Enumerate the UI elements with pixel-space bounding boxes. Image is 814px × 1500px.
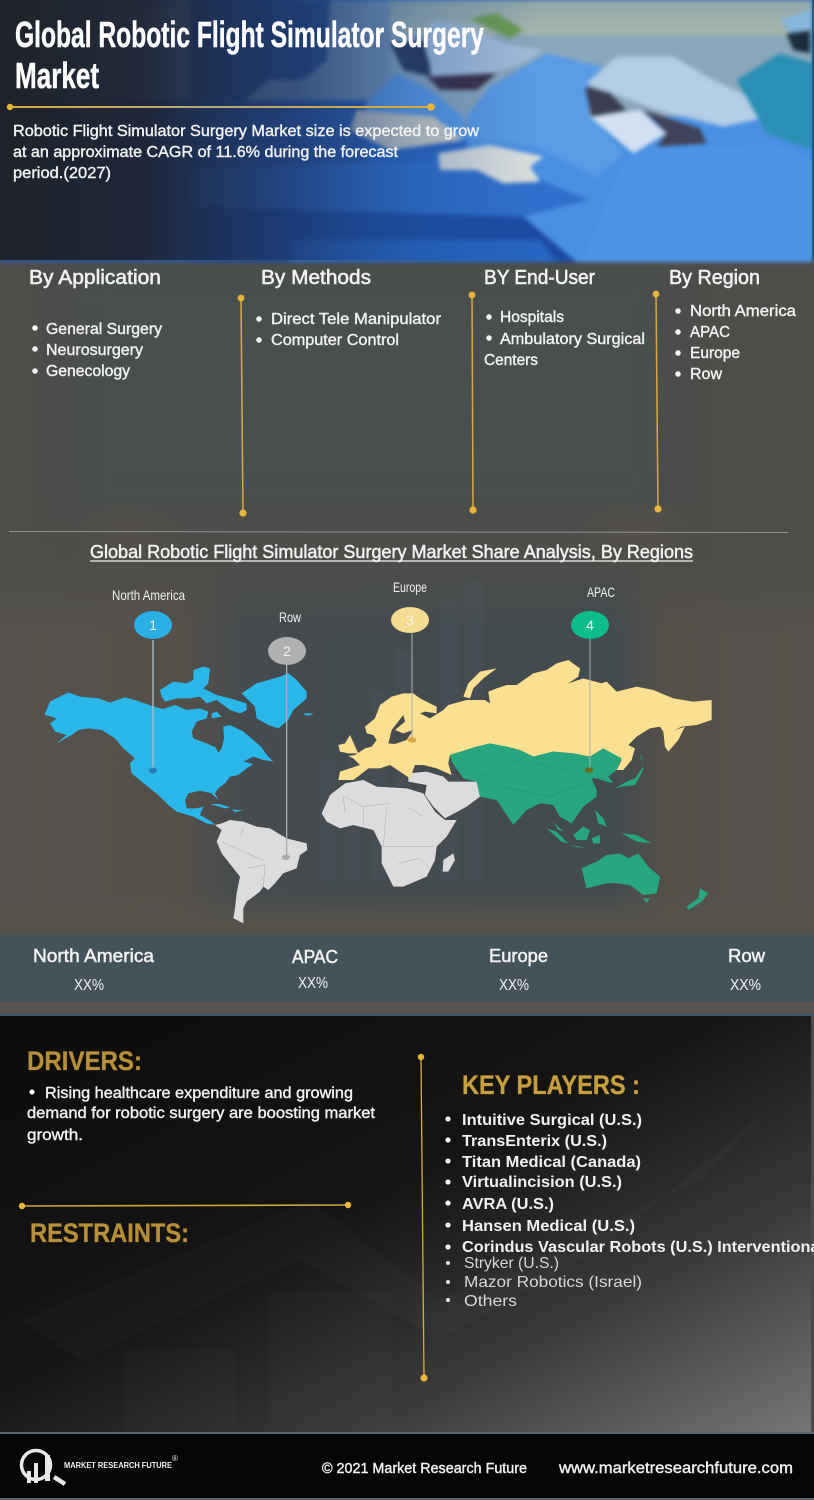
panel: drivers, restraints, key players background (0, 1016, 811, 1432)
panel: by region (669, 267, 796, 383)
share table (0, 935, 814, 1016)
brand name: ® (172, 1454, 178, 1463)
brand name: MARKET RESEARCH FUTURE (64, 1461, 173, 1470)
panel: by end-user: Ambulatory Surgical (500, 331, 645, 348)
marker 2: row: 2 (283, 643, 291, 659)
drivers text (27, 1085, 376, 1144)
title: Global Robotic Flight Simulator Surgery (15, 14, 484, 55)
title (15, 14, 484, 96)
panel: by application: General Surgery (46, 321, 162, 338)
intro text: period.(2027) (13, 165, 111, 182)
panel: by methods: Computer Control (271, 332, 399, 349)
title: Market (15, 55, 99, 96)
divider 1 (238, 295, 247, 517)
drivers heading: DRIVERS: (27, 1046, 142, 1076)
key players list: Mazor Robotics (Israel) (464, 1274, 642, 1291)
share table: Europe (489, 946, 548, 966)
chart heading: Global Robotic Flight Simulator Surgery Market Share Analysis, By Regions (90, 542, 693, 562)
panel: by application: By Application (29, 267, 161, 289)
drivers divider (19, 1202, 351, 1209)
key players list: Others (464, 1293, 517, 1310)
key players heading: KEY PLAYERS : (462, 1070, 640, 1100)
intro text: Robotic Flight Simulator Surgery Market size is expected to grow (13, 123, 479, 140)
panel: by region: Europe (690, 345, 740, 362)
divider 3 (653, 291, 662, 513)
marker 1: north america: North America (112, 587, 185, 603)
marker 4: apac: 4 (586, 617, 594, 633)
copyright: © 2021 Market Research Future (322, 1460, 527, 1477)
key players list: AVRA (U.S.) (462, 1196, 554, 1213)
panel: by region: APAC (690, 324, 730, 341)
panel: by application: Genecology (46, 363, 130, 380)
panel: by region: By Region (669, 267, 760, 289)
pin: europe line (410, 633, 413, 738)
key players list: TransEnterix (U.S.) (462, 1133, 607, 1150)
share table: Row (728, 946, 766, 966)
key players list (445, 1112, 814, 1310)
hero photo of surgeons (0, 0, 814, 262)
pin: row line (285, 660, 289, 857)
panel: by end-user (484, 267, 645, 369)
divider 2 (469, 292, 477, 514)
panel: by application: Neurosurgery (46, 342, 143, 359)
key players list: Corindus Vascular Robots (U.S.) Interventional (462, 1239, 814, 1256)
drivers text: growth. (27, 1127, 83, 1144)
region: africa and middle east (322, 772, 480, 887)
panel: by end-user: Hospitals (500, 309, 564, 326)
title divider (7, 103, 435, 111)
region: north america (45, 667, 313, 825)
key players list: Stryker (U.S.) (464, 1255, 559, 1272)
drivers text: Rising healthcare expenditure and growing (45, 1085, 353, 1102)
marker 3: europe (391, 579, 429, 633)
share table: XX% (298, 975, 328, 992)
panel: by methods: Direct Tele Manipulator (271, 311, 442, 328)
restraints heading: RESTRAINTS: (30, 1218, 189, 1248)
brand name (64, 1454, 178, 1470)
panel: by end-user: Centers (484, 352, 538, 369)
key players list: Titan Medical (Canada) (462, 1154, 641, 1171)
pin: apac dot (585, 767, 593, 773)
vertical divider (418, 1054, 428, 1382)
americas (45, 640, 313, 923)
panel: by methods (256, 267, 442, 349)
marker 4: apac (571, 584, 615, 639)
key players list: Hansen Medical (U.S.) (462, 1218, 635, 1235)
region: apac (450, 743, 708, 910)
marker 3: europe: 3 (406, 612, 414, 628)
pin: apac line (588, 627, 591, 768)
region: europe and russia (338, 660, 712, 780)
key players list: Virtualincision (U.S.) (462, 1174, 622, 1191)
pin: north america line (151, 640, 155, 770)
share table: XX% (74, 977, 104, 994)
baltic sea gap (388, 715, 413, 744)
share table: North America (33, 946, 155, 966)
pin: europe dot (408, 737, 416, 743)
icon: market research future logo (22, 1450, 65, 1484)
eurasia, africa and oceania (322, 627, 712, 910)
panel: by application (29, 267, 162, 380)
intro text (13, 123, 479, 182)
region: south america (215, 820, 307, 923)
drivers text: demand for robotic surgery are boosting market (27, 1105, 376, 1122)
marker 2: row: Row (279, 609, 302, 625)
share table: XX% (730, 977, 761, 994)
marker 2: row (268, 609, 306, 665)
panel: by methods: By Methods (261, 267, 371, 289)
marker 3: europe: Europe (393, 579, 427, 595)
panel: by end-user: BY End-User (484, 267, 595, 289)
footer (0, 1432, 814, 1500)
background: mid section (0, 260, 814, 1020)
intro text: at an approximate CAGR of 11.6% during the forecast (13, 144, 399, 161)
world map (45, 627, 712, 923)
marker 1: north america: 1 (149, 617, 157, 633)
panel: by region: Row (690, 366, 722, 383)
website: www.marketresearchfuture.com (558, 1460, 793, 1477)
pin: north america dot (149, 768, 157, 774)
key players list: Intuitive Surgical (U.S.) (462, 1112, 642, 1129)
pin: row dot (282, 855, 290, 860)
share table: APAC (292, 947, 338, 967)
marker 4: apac: APAC (587, 584, 615, 600)
panel: by region: North America (690, 303, 796, 320)
share table: XX% (499, 977, 529, 994)
marker 1: north america (112, 587, 185, 639)
